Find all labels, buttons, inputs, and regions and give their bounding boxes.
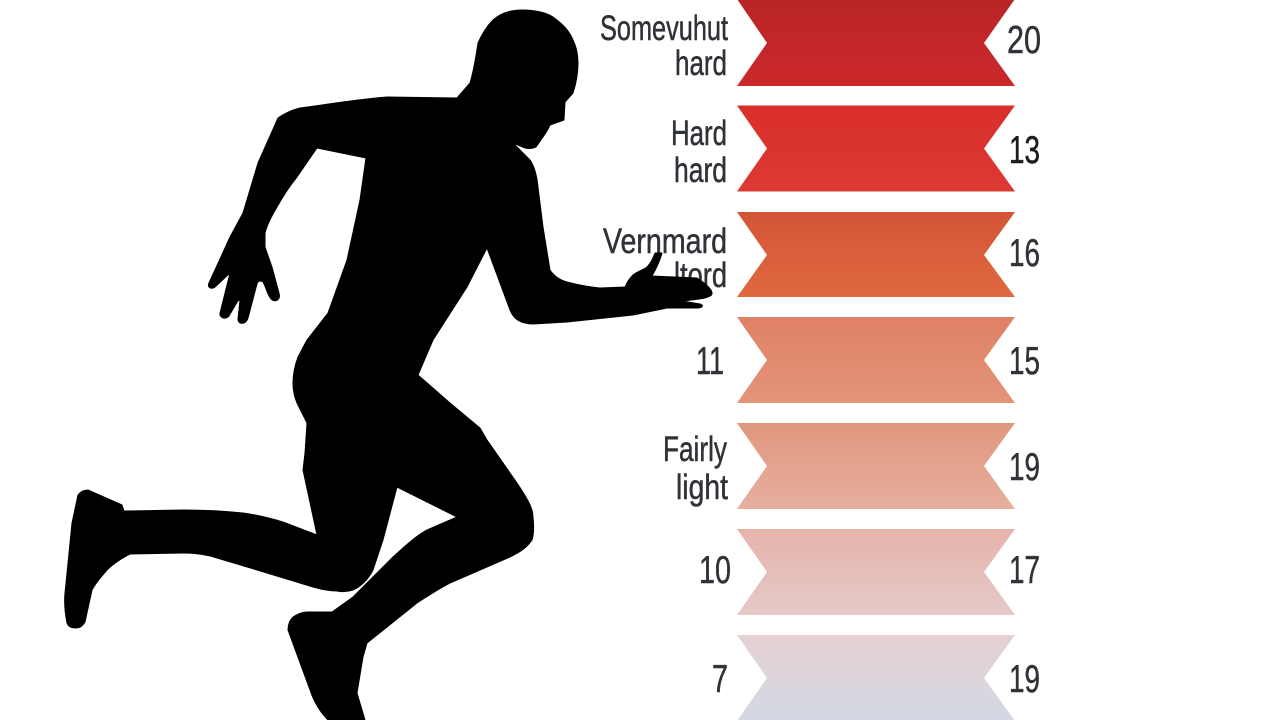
scale band 6: 10, 17: 17 (1009, 549, 1040, 592)
scale band 3: vernmard hard, 16 (603, 212, 1040, 297)
scale band 7: 7, 19: 7 (712, 658, 728, 701)
scale band 3: vernmard hard, 16: 16 (1009, 232, 1040, 275)
scale band 1: somewhat hard, 20: hard (675, 44, 727, 83)
scale band 1: somewhat hard, 20 (600, 0, 1041, 86)
scale band 2: hard hard, 13 (671, 106, 1040, 192)
scale band 3: vernmard hard, 16: ltord (674, 256, 727, 295)
scale band 4: 11, 15: 15 (1009, 340, 1040, 383)
scale band 4: 11, 15: 11 (696, 340, 724, 383)
scale band 1: somewhat hard, 20: 20 (1007, 19, 1041, 62)
scale band 7: 7, 19 (712, 635, 1040, 720)
scale band 3: vernmard hard, 16: Vernmard (603, 222, 727, 261)
scale band 2: hard hard, 13: Hard (671, 114, 727, 153)
scale band 5: fairly light, 19: light (676, 468, 728, 507)
scale band 2: hard hard, 13: 13 (1009, 129, 1040, 172)
scale band 1: somewhat hard, 20: Somevuhut (600, 9, 728, 48)
scale band 5: fairly light, 19: Fairly (663, 430, 727, 469)
scale band 2: hard hard, 13: hard (674, 151, 727, 190)
icon: running person silhouette (65, 10, 712, 720)
scale band 6: 10, 17: 10 (699, 549, 731, 592)
scale band 5: fairly light, 19 (663, 423, 1040, 509)
scale band 6: 10, 17 (699, 529, 1040, 615)
scale band 5: fairly light, 19: 19 (1009, 446, 1040, 489)
scale band 4: 11, 15 (696, 317, 1040, 403)
scale band 7: 7, 19: 19 (1009, 658, 1040, 701)
